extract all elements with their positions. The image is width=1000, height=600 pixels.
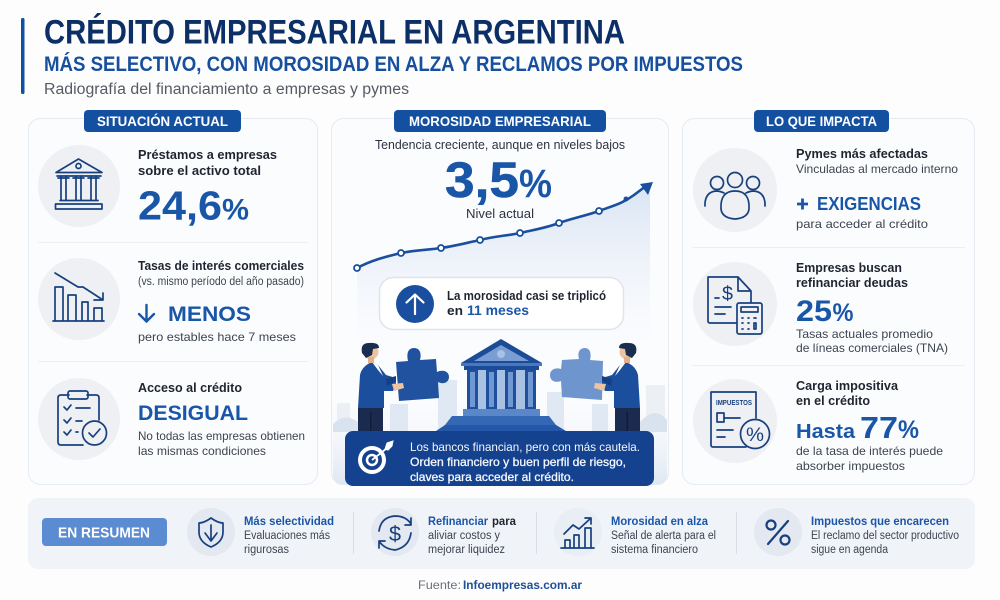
stat: 3,5%: % (519, 162, 552, 206)
text: acceso: Acceso al crédito (138, 380, 242, 395)
heading: situación actual (84, 110, 241, 132)
text: pymes (796, 146, 958, 231)
callout: casi se triplicó (380, 278, 624, 330)
icon: checklist (38, 378, 120, 460)
item: impuestos que encarecen: Impuestos que encarecen (811, 514, 949, 528)
text: préstamos: % (222, 194, 249, 226)
item: más selectividad: Evaluaciones más (244, 530, 330, 542)
panel: situación actual (28, 110, 318, 484)
stat: 3,5% (445, 152, 552, 221)
icon: falling bar chart (38, 258, 120, 340)
stat: 3,5%: Nivel actual (466, 207, 534, 221)
badge: en resumen: EN RESUMEN (58, 524, 150, 542)
text: carga impositiva: absorber impuestos (796, 459, 905, 473)
icon: target (360, 441, 393, 472)
badge: en resumen (42, 518, 167, 546)
bank building (436, 339, 566, 431)
illustration: bank and business people with puzzle (333, 339, 667, 485)
heading: situación actual: SITUACIÓN ACTUAL (97, 112, 228, 129)
icon: document and calculator: $ (722, 284, 733, 305)
callout: los bancos financian: Orden financiero y buen perfil de riesgo, (410, 455, 626, 469)
heading: lo que impacta (754, 110, 889, 132)
text: carga impositiva: 77 (860, 410, 898, 445)
icon: arrow down (139, 305, 154, 322)
text: préstamos: 24,6 (138, 182, 222, 228)
text: carga impositiva: de la tasa de interés puede (796, 444, 943, 458)
heading: lo que impacta: LO QUE IMPACTA (766, 113, 877, 129)
icon: tax document: % (746, 425, 764, 446)
text: pymes: Pymes más afectadas (796, 146, 928, 161)
text: tasas: (vs. mismo período del año pasado) (138, 276, 304, 288)
text: pymes: para acceder al crédito (796, 217, 928, 231)
callout: casi se triplicó: 11 meses (467, 302, 529, 318)
header (21, 12, 743, 98)
item: refinanciar: para (492, 514, 516, 528)
subtitle: MÁS SELECTIVO, CON MOROSIDAD EN ALZA Y RECLAMOS POR IMPUESTOS (44, 51, 743, 76)
text: acceso: DESIGUAL (138, 401, 248, 425)
text: refinanciar (796, 260, 948, 355)
icon: people (693, 148, 777, 232)
panel: morosidad empresarial (332, 110, 668, 486)
item: refinanciar: Refinanciar (428, 514, 488, 528)
text: préstamos (138, 147, 277, 228)
text: tendencia: Tendencia creciente, aunque en niveles bajos (375, 137, 625, 152)
text: tasas: MENOS (168, 303, 251, 326)
icon: tax document (693, 379, 777, 463)
callout: casi se triplicó: La morosidad casi se triplicó (447, 288, 606, 303)
text: acceso (138, 380, 305, 458)
text: tasas (138, 258, 304, 344)
item: refinanciar: $ (389, 523, 401, 546)
text: carga impositiva: % (898, 416, 919, 444)
text: préstamos: Préstamos a empresas (138, 147, 277, 162)
callout: casi se triplicó: en (447, 303, 463, 318)
stat: 3,5%: 3,5 (445, 152, 519, 208)
puzzle piece dark (396, 348, 449, 401)
text: carga impositiva: en el crédito (796, 393, 870, 408)
text: refinanciar: Tasas actuales promedio (796, 327, 933, 341)
item: más selectividad (187, 508, 334, 556)
text: refinanciar: 25 (796, 295, 832, 328)
item: morosidad en alza (554, 508, 716, 556)
tagline: Radiografía del financiamiento a empresas y pymes (44, 81, 409, 98)
item: refinanciar (371, 508, 516, 556)
text: préstamos: sobre el activo total (138, 163, 261, 178)
text: carga impositiva (796, 378, 943, 473)
item: morosidad en alza: Señal de alerta para el (611, 530, 716, 542)
item: morosidad en alza: sistema financiero (611, 544, 698, 556)
item: refinanciar: aliviar costos y (428, 530, 500, 542)
source: Fuente: (418, 578, 461, 592)
text: tasas: pero estables hace 7 meses (138, 330, 296, 344)
heading: morosidad (394, 110, 606, 132)
panel: lo que impacta (682, 110, 974, 484)
man right (594, 343, 640, 431)
text: carga impositiva: Hasta (796, 421, 856, 443)
item: impuestos que encarecen: sigue en agenda (811, 544, 889, 556)
text: refinanciar: refinanciar deudas (796, 275, 908, 290)
text: acceso: las mismas condiciones (138, 444, 266, 458)
skyline (333, 380, 667, 485)
item: más selectividad: rigurosas (244, 544, 289, 556)
icon: bank (38, 145, 120, 227)
heading: morosidad: MOROSIDAD EMPRESARIAL (409, 113, 591, 129)
puzzle piece light (550, 348, 603, 400)
text: carga impositiva: Carga impositiva (796, 378, 899, 393)
callout: los bancos financian (345, 431, 654, 486)
item: más selectividad: Más selectividad (244, 514, 334, 528)
icon: tax document: IMPUESTOS (716, 400, 752, 407)
icon: document and calculator (693, 262, 777, 346)
text: refinanciar: Empresas buscan (796, 260, 902, 275)
man left (358, 343, 404, 431)
panel: en resumen (28, 498, 975, 569)
source: Infoempresas.com.ar (463, 578, 582, 592)
text: tasas: Tasas de interés comerciales (138, 258, 304, 273)
callout: los bancos financian: Los bancos financian, pero con más cautela. (410, 440, 640, 454)
item: impuestos que encarecen: El reclamo del sector productivo (811, 530, 959, 542)
item: refinanciar: mejorar liquidez (428, 544, 505, 556)
title: CRÉDITO EMPRESARIAL EN ARGENTINA (44, 12, 625, 52)
callout: los bancos financian: claves para acceder al crédito. (410, 470, 574, 484)
text: pymes: Vinculadas al mercado interno (796, 162, 958, 176)
text: refinanciar: % (832, 299, 854, 327)
text: pymes: EXIGENCIAS (817, 194, 921, 214)
item: morosidad en alza: Morosidad en alza (611, 514, 708, 528)
line chart (354, 182, 653, 340)
item: impuestos que encarecen (754, 508, 959, 556)
text: refinanciar: de líneas comerciales (TNA) (796, 341, 948, 355)
text: acceso: No todas las empresas obtienen (138, 429, 305, 443)
